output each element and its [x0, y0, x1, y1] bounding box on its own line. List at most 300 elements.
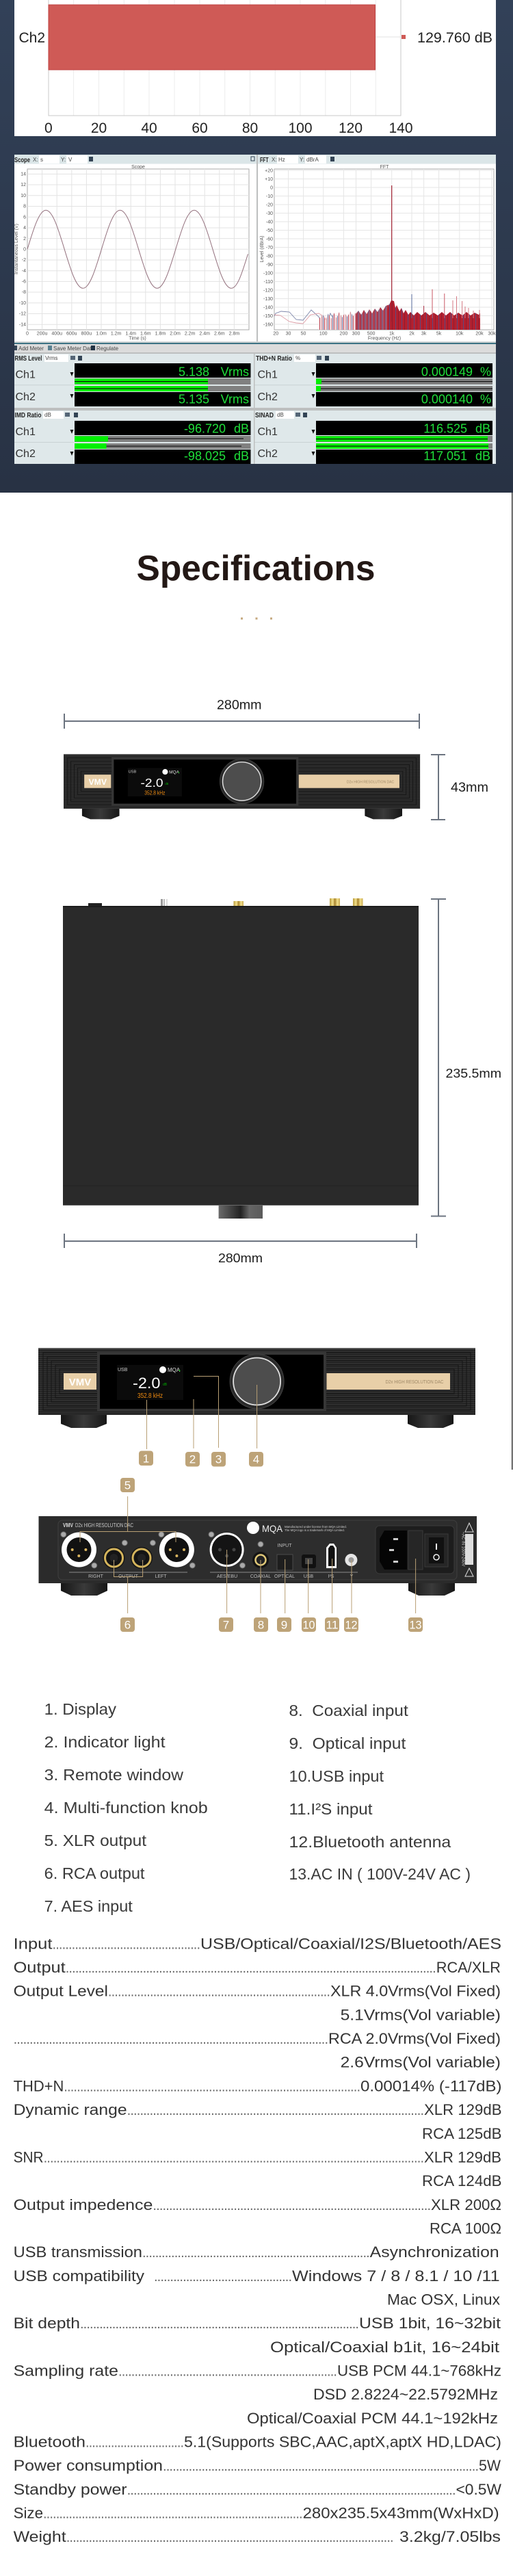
rear label rules	[69, 1572, 358, 1573]
panel: RMS level meter: Ch1	[15, 369, 36, 380]
row: SNR: SNR	[14, 2148, 44, 2166]
badges 6-13: 6	[124, 1619, 131, 1631]
AES input	[210, 1533, 244, 1567]
x axis labels: 50	[301, 331, 306, 337]
panel: SINAD meter: dB	[277, 412, 284, 418]
parts list: left column: 1. Display	[44, 1700, 117, 1718]
row: Standby power: <0.5W	[456, 2481, 501, 2498]
illustration: rear view	[38, 1516, 477, 1596]
panel: IMD ratio meter: dB	[234, 450, 249, 463]
row: Bit depth optical: Optical/Coaxial b1it, 16~24bit	[270, 2339, 499, 2356]
panel: FFT: FFT	[380, 165, 389, 170]
x axis labels: 1.4m	[125, 331, 136, 337]
panel: RMS level meter: Vrms	[45, 355, 57, 361]
x axis labels: 2.2m	[185, 331, 196, 337]
illustration: front view small: -2.0	[141, 776, 163, 790]
x axis labels: 500	[367, 331, 376, 337]
y axis labels: 0	[23, 248, 26, 252]
parts list: right column: 9. Optical input	[289, 1734, 406, 1752]
x axis labels: 2.4m	[199, 331, 210, 337]
rear brand text: VMV	[63, 1522, 74, 1528]
row: Power consumption: 5W	[479, 2457, 501, 2474]
parts list: right column: 10.USB input	[289, 1767, 384, 1785]
Bluetooth antenna	[345, 1554, 357, 1566]
callout lines: front view	[146, 1377, 257, 1449]
row: THD+N: THD+N	[14, 2077, 64, 2094]
parts list: left column: 4. Multi-function knob	[44, 1799, 208, 1817]
parts list: left column: 3. Remote window	[44, 1766, 183, 1784]
rear port labels: OUTPUT	[118, 1574, 139, 1579]
XLR output left channel	[159, 1533, 194, 1567]
parts list: right column: 11.I²S input	[289, 1800, 373, 1818]
toolbar strip: Regulate	[96, 346, 119, 352]
x axis labels: Time (s)	[129, 337, 146, 341]
badges 6-13: 9	[281, 1619, 287, 1631]
x axis labels: 1k	[389, 331, 395, 337]
rear port labels: AES/EBU	[217, 1574, 237, 1579]
rear port labels: USB	[304, 1574, 314, 1579]
panel: IMD ratio meter: IMD Ratio	[15, 412, 41, 419]
y axis labels: +10	[265, 177, 273, 182]
y axis labels: 10	[21, 194, 26, 198]
panel: RMS level meter: Vrms	[221, 365, 249, 379]
panel: SINAD meter: 116.525	[423, 422, 467, 436]
illustration: front view small: D2x HIGH RESOLUTION DAC	[347, 780, 394, 784]
panel: IMD ratio meter: dB	[44, 412, 51, 418]
panel: FFT	[258, 155, 496, 341]
y axis labels: 12	[21, 183, 26, 187]
row: THD+N: 0.00014% (-117dB)	[360, 2077, 502, 2094]
rear port labels: OPTICAL	[274, 1574, 295, 1579]
row: Output impedence: Output impedence	[14, 2196, 153, 2213]
row: Size: Size	[14, 2504, 43, 2522]
x axis labels: 20k	[475, 331, 484, 337]
row: SNR	[14, 2148, 501, 2166]
illustration: front view labelled: dB	[163, 1383, 168, 1387]
x axis labels: 200u	[37, 331, 47, 337]
panel: IMD ratio meter: Ch1	[15, 426, 36, 438]
row: Power consumption: Power consumption	[14, 2457, 163, 2474]
y axis labels: 4	[23, 226, 26, 231]
x axis labels	[273, 331, 496, 341]
panel: IMD ratio meter: Ch2	[15, 448, 36, 460]
panel: RMS level meter	[14, 354, 254, 408]
y axis labels: -110	[264, 280, 273, 285]
y axis labels: -80	[266, 255, 273, 259]
panel: IMD ratio meter: -98.025	[184, 450, 226, 463]
row: Input: ..............................................	[52, 1937, 200, 1952]
row: Size: 280x235.5x43mm(WxHxD)	[303, 2504, 499, 2522]
row: RCA fixed: RCA 2.0Vrms(Vol Fixed)	[328, 2030, 501, 2047]
background: dark navy test section	[0, 0, 513, 493]
dimension: width 280mm below top view: 280mm	[218, 1251, 263, 1265]
panel: THD+N ratio meter: 0.000140	[421, 393, 473, 406]
illustration: front view labelled: D2x HIGH RESOLUTION DAC	[386, 1380, 443, 1385]
y axis labels: -100	[263, 271, 273, 276]
row: Standby power: ......................................................................................................	[127, 2483, 456, 2498]
rear MQA logo: Manufactured under license from MQA Limited.	[285, 1525, 347, 1528]
row: Standby power: Standby power	[14, 2481, 127, 2498]
row: Output: RCA/XLR	[436, 1959, 501, 1976]
panel: IMD ratio meter: dB	[234, 422, 249, 436]
row: Output impedence	[14, 2196, 501, 2213]
y axis labels: -12	[19, 312, 26, 316]
row: Dynamic range: Dynamic range	[14, 2101, 127, 2118]
row: USB transmission	[14, 2243, 499, 2261]
rear port labels: LEFT	[155, 1574, 167, 1579]
specification table	[14, 1935, 502, 2545]
panel: scope: Y:	[61, 157, 66, 163]
parts list: left column: 7. AES input	[44, 1897, 133, 1915]
rear MQA logo: The MQA logo is a trademark of MQA Limited.	[285, 1528, 345, 1532]
row: Input: USB/Optical/Coaxial/I2S/Bluetooth/AES	[200, 1935, 501, 1952]
warning labels: ~AC IN 100V-240V	[461, 1532, 465, 1566]
x axis labels: 0	[44, 120, 53, 136]
row: Bluetooth: ...............................	[86, 2436, 184, 2451]
rear brand text: D2x HIGH RESOLUTION DAC	[75, 1522, 133, 1528]
panel: RMS level meter: Vrms	[221, 393, 249, 406]
illustration: front view labelled: MQA	[168, 1367, 181, 1373]
row: Dynamic range: XLR 129dB	[424, 2101, 502, 2118]
sine waveform	[27, 210, 248, 288]
x axis labels: 20	[91, 120, 107, 136]
badges 1-4: 3	[215, 1453, 222, 1466]
panel: FFT: Y:	[300, 157, 304, 163]
panel: scope: Scope	[14, 157, 30, 164]
row: Bluetooth: 5.1(Supports SBC,AAC,aptX,aptX HD,LDAC)	[184, 2433, 501, 2451]
x axis labels: 800u	[81, 331, 92, 337]
y axis labels: 6	[23, 215, 26, 220]
parts list: right column: 12.Bluetooth antenna	[289, 1833, 451, 1851]
row: Output	[14, 1959, 501, 1976]
parts list: left column	[44, 1700, 208, 1915]
x axis labels: 100	[319, 331, 328, 337]
badge 5	[120, 1478, 135, 1492]
warning labels	[461, 1523, 473, 1576]
y axis labels: -14	[19, 323, 26, 327]
y axis labels: -120	[263, 289, 273, 293]
y axis labels: -10	[266, 194, 273, 199]
y axis labels: -160	[263, 323, 273, 327]
panel: SINAD meter: 117.051	[423, 450, 467, 463]
x axis labels: 300	[352, 331, 360, 337]
optical input	[277, 1554, 293, 1570]
x axis labels: 200	[340, 331, 347, 337]
illustration: front view labelled: 352.8 kHz	[137, 1392, 163, 1400]
panel: SINAD meter: Ch2	[257, 448, 278, 460]
dimension: depth 235.5mm	[431, 899, 501, 1217]
row: Power consumption	[14, 2457, 501, 2474]
coaxial input	[252, 1552, 269, 1568]
y axis labels: +20	[265, 168, 273, 174]
x axis labels: 80	[242, 120, 258, 136]
badges 6-13: 12	[345, 1619, 357, 1631]
panel: SINAD meter: Ch1	[257, 426, 278, 438]
rear port labels	[88, 1544, 354, 1579]
label: Ch2: Ch2	[19, 30, 45, 46]
dimension: width 280mm above front view: 280mm	[217, 698, 261, 713]
row: Sampling optical: Optical/Coaxial PCM 44.1~192kHz	[247, 2410, 498, 2427]
rear port labels: INPUT	[278, 1544, 292, 1548]
x axis labels: 1.8m	[155, 331, 166, 337]
row: Bit depth	[14, 2315, 501, 2332]
x axis labels: 2.6m	[214, 331, 225, 337]
row: Power consumption: ..................................................................................................	[163, 2459, 479, 2474]
heading dots	[241, 617, 272, 620]
toolbar strip: Add Meter	[18, 346, 44, 352]
panel: IMD ratio meter	[14, 411, 254, 464]
row: Sampling rate: USB PCM 44.1~768kHz	[337, 2362, 501, 2380]
panel: SINAD meter	[254, 411, 496, 464]
badges 6-13: 13	[409, 1619, 421, 1631]
row: USB compatibility: USB compatibility	[14, 2267, 144, 2285]
x axis labels: 10k	[456, 331, 464, 337]
rear port labels: RIGHT	[88, 1574, 104, 1579]
y axis labels: -4	[22, 269, 26, 274]
parts list: left column: 5. XLR output	[44, 1832, 147, 1849]
x axis labels: 3k	[421, 331, 427, 337]
dimension: height 43mm	[431, 755, 488, 820]
y axis labels: -50	[266, 229, 273, 233]
value: 129.760 dB: 129.760 dB	[417, 30, 492, 46]
row: Output Level: XLR 4.0Vrms(Vol Fixed)	[330, 1983, 501, 2000]
panel: THD+N ratio meter: Ch2	[257, 391, 278, 403]
illustration: front view labelled: VMV	[69, 1377, 91, 1388]
rear port labels: I²S	[328, 1574, 334, 1579]
x axis labels: 5k	[436, 331, 442, 337]
row: USB transmission: .......................................................................	[142, 2246, 370, 2261]
row: Weight	[14, 2528, 501, 2545]
row: Dynamic range RCA: RCA 125dB	[422, 2125, 502, 2142]
panel: FFT: Hz	[278, 157, 285, 163]
y axis labels: -130	[263, 297, 273, 302]
parts list: right column	[289, 1702, 471, 1883]
y axis labels: 8	[23, 204, 26, 209]
panel: THD+N ratio meter: 0.000149	[421, 365, 473, 379]
badge 5: 5	[124, 1479, 131, 1492]
callout lines: rear view	[80, 1496, 416, 1613]
row: Size	[14, 2504, 499, 2522]
screws	[61, 1532, 263, 1568]
illustration: front view labelled: -2.0	[133, 1375, 160, 1392]
panel: audio analyzer screenshot	[14, 155, 496, 464]
row: THD+N	[14, 2077, 502, 2094]
row: USB compatibility	[14, 2267, 500, 2285]
fundamental peak at 1 kHz	[391, 185, 393, 322]
panel: RMS level meter: Ch2	[15, 391, 36, 403]
panel: THD+N ratio meter: Ch1	[257, 369, 278, 380]
row: Weight: 3.2kg/7.05lbs	[399, 2528, 501, 2545]
row: USB compatibility: ...........................................	[154, 2269, 292, 2285]
bar: Ch2 level	[49, 5, 375, 70]
x axis labels: 120	[339, 120, 363, 136]
y axis labels: -60	[266, 237, 273, 242]
panel: THD+N ratio meter	[254, 354, 496, 408]
illustration: front view small: MQA	[169, 770, 180, 775]
x axis labels: 140	[389, 120, 413, 136]
row: Dynamic range: ............................................................................................	[127, 2103, 424, 2118]
y axis labels: -140	[263, 305, 273, 311]
panel: FFT: X:	[272, 157, 277, 163]
row: Standby power	[14, 2481, 501, 2498]
row: Sampling rate	[14, 2362, 501, 2380]
x axis labels: 0	[26, 331, 29, 337]
parts list: right column: 13.AC IN ( 100V-24V AC )	[289, 1865, 471, 1883]
illustration: top view	[63, 898, 419, 1219]
x axis labels: 60	[192, 120, 208, 136]
illustration: front view small	[64, 754, 420, 819]
row: Bit depth: USB 1bit, 16~32bit	[359, 2315, 501, 2332]
illustration: front view labelled: USB	[118, 1368, 128, 1372]
row: Size: .................................................................................	[43, 2507, 303, 2522]
panel: SINAD meter: dB	[475, 450, 490, 463]
panel: scope: Instantaneous Level (V)	[14, 224, 19, 274]
panel: SINAD meter: SINAD	[255, 412, 274, 419]
illustration: front view small: VMV	[89, 777, 107, 787]
row: Output impedence: ......................................................................................	[153, 2198, 431, 2213]
row: USB transmission: USB transmission	[14, 2243, 142, 2261]
toolbar strip: Save Meter Data	[53, 346, 95, 352]
row: Bit depth: .......................................................................................	[80, 2317, 359, 2332]
x axis labels: 1.2m	[111, 331, 122, 337]
panel: scope	[14, 155, 256, 341]
illustration: front view small: USB	[129, 770, 136, 775]
rear brand text	[63, 1522, 133, 1528]
x axis labels: 100	[288, 120, 313, 136]
panel: FFT: FFT	[260, 157, 268, 164]
row: Output impedence RCA: RCA 100Ω	[430, 2220, 501, 2237]
toolbar strip	[14, 341, 496, 352]
illustration: front view small: dB	[165, 782, 169, 785]
panel: THD+N ratio meter: %	[480, 365, 491, 379]
row: RCA fixed: ..................................................................................................	[14, 2032, 328, 2047]
badges 1-4: 1	[143, 1452, 149, 1466]
y axis labels: -20	[266, 203, 273, 208]
badges 1-4: 4	[253, 1453, 259, 1466]
dimension: width 280mm below top view	[64, 1234, 417, 1265]
y axis labels: -40	[266, 220, 273, 224]
XLR output right channel	[62, 1533, 96, 1567]
parts list: right column: 8. Coaxial input	[289, 1702, 408, 1719]
row: Bluetooth	[14, 2433, 501, 2451]
noise floor	[319, 311, 356, 330]
dimension: height 43mm: 43mm	[451, 781, 488, 795]
row: Dynamic range	[14, 2101, 502, 2118]
x axis labels: 2.0m	[170, 331, 181, 337]
x axis labels	[44, 120, 413, 136]
badges 6-13: 11	[326, 1619, 338, 1631]
row: SNR: XLR 129dB	[424, 2148, 501, 2166]
illustration: front view small: 352.8 kHz	[144, 790, 165, 796]
row: RCA fixed	[14, 2030, 501, 2047]
RCA outputs	[103, 1547, 153, 1569]
x axis labels: 30k	[488, 331, 496, 337]
x axis labels: 400u	[51, 331, 62, 337]
panel: THD+N ratio meter: %	[295, 355, 300, 361]
y axis labels: 2	[23, 237, 26, 242]
y axis labels: 14	[21, 172, 26, 177]
row: SNR: ......................................................................................................................	[44, 2151, 424, 2166]
badges 1-4: 2	[189, 1453, 196, 1466]
row: Sampling rate: Sampling rate	[14, 2362, 118, 2380]
x axis labels: 2.8m	[229, 331, 239, 337]
row: Weight: ......................................................................................................	[66, 2530, 394, 2545]
harmonic spikes	[412, 289, 479, 318]
y axis labels: -6	[22, 279, 26, 285]
row: Output impedence: XLR 200Ω	[431, 2196, 501, 2213]
y axis labels: -30	[266, 211, 273, 216]
y axis labels: -10	[19, 301, 26, 306]
x axis labels: 2k	[409, 331, 415, 337]
heading: Specifications: Specifications	[137, 549, 375, 588]
page edge line	[512, 493, 513, 1470]
row: Input	[14, 1935, 501, 1952]
panel: RMS level meter: RMS Level	[15, 355, 42, 363]
x axis labels: 30	[286, 331, 291, 337]
badges 6-13: 10	[302, 1619, 315, 1631]
x axis labels: 1.6m	[140, 331, 151, 337]
row: Output: Output	[14, 1959, 66, 1976]
y axis labels	[19, 172, 26, 327]
panel: THD+N ratio meter: %	[480, 393, 491, 406]
row: USB compatibility: Windows 7 / 8 / 8.1 / 10 /11	[292, 2267, 500, 2285]
row: Bluetooth: Bluetooth	[14, 2433, 86, 2451]
panel: RMS level meter: 5.135	[179, 393, 209, 406]
row: Output Level: .....................................................................	[108, 1985, 330, 2000]
panel: SINAD meter: dB	[475, 422, 490, 436]
illustration: front view labelled	[38, 1348, 475, 1428]
badges 6-13: 7	[223, 1619, 229, 1631]
row: Output Level: Output Level	[14, 1983, 108, 2000]
x axis labels: 40	[141, 120, 157, 136]
panel: RMS level meter: 5.138	[179, 365, 209, 379]
dimension: depth 235.5mm: 235.5mm	[446, 1067, 501, 1080]
row: Output Level	[14, 1983, 501, 2000]
panel: SNR bar chart	[14, 0, 496, 136]
x axis labels: 20	[273, 331, 278, 337]
rear port labels: COAXIAL	[250, 1574, 271, 1579]
x axis labels	[26, 331, 239, 341]
panel: THD+N ratio meter: THD+N Ratio	[256, 355, 292, 363]
rear MQA logo: MQA	[262, 1523, 283, 1534]
badges 6-13	[120, 1617, 423, 1632]
parts list: left column: 2. Indicator light	[44, 1733, 166, 1751]
y axis labels: 0	[270, 186, 273, 190]
y axis labels: -70	[266, 246, 273, 250]
y axis labels: -90	[266, 263, 273, 268]
dimension: width 280mm above front view	[64, 698, 419, 729]
y axis labels: -150	[263, 314, 273, 319]
row: XLR variable: 5.1Vrms(Vol variable)	[341, 2006, 501, 2023]
panel: FFT: dBrA	[306, 157, 319, 163]
x axis labels: Frequency (Hz)	[368, 337, 401, 341]
x axis labels: 600u	[66, 331, 77, 337]
panel: scope: X:	[33, 157, 38, 163]
y axis labels: -2	[22, 258, 26, 263]
panel: FFT: Level (dBrA)	[260, 236, 265, 262]
row: USB transmission: Asynchronization	[370, 2243, 499, 2261]
row: DSD: DSD 2.8224~22.5792MHz	[313, 2386, 498, 2403]
y axis labels	[263, 168, 273, 327]
row: Input: Input	[14, 1935, 53, 1952]
AC inlet	[376, 1526, 454, 1574]
legend marker	[402, 35, 406, 39]
panel: IMD ratio meter: -96.720	[184, 422, 226, 436]
y axis labels: -8	[22, 290, 26, 295]
row: Output: ...................................................................................................................	[66, 1961, 436, 1976]
row: Bit depth: Bit depth	[14, 2315, 80, 2332]
rear MQA logo	[247, 1522, 347, 1534]
